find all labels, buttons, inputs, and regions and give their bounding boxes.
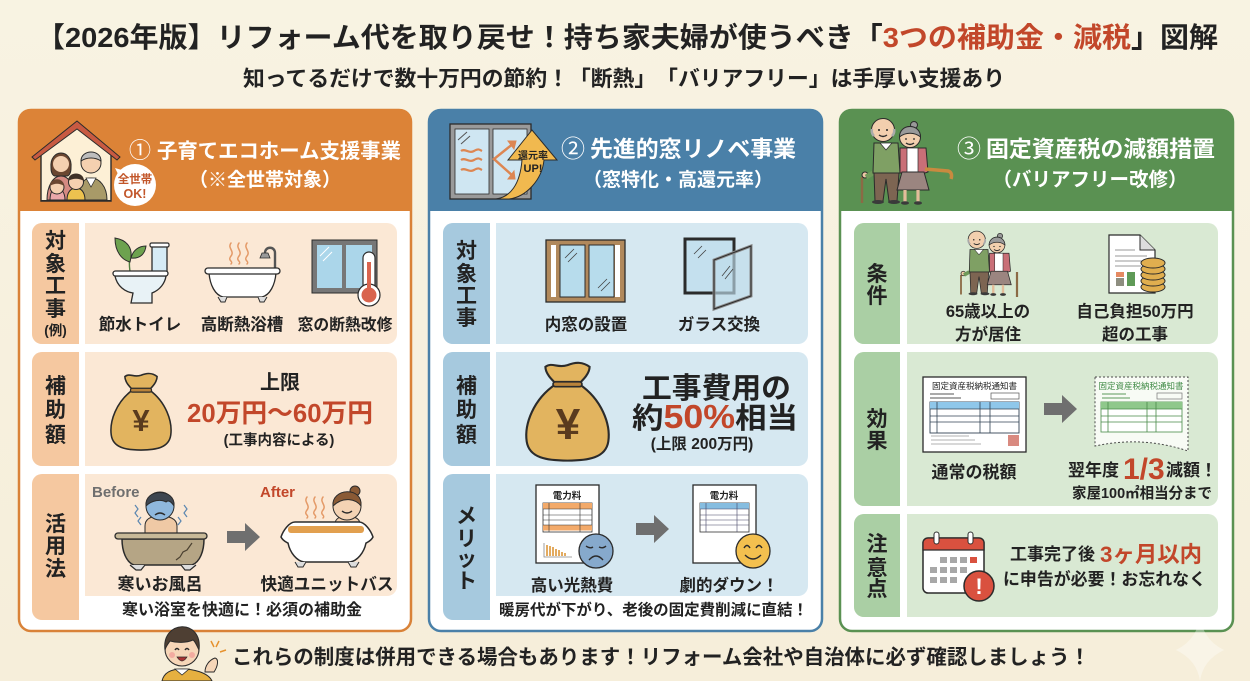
- icon: document and coins: [1109, 235, 1165, 293]
- label: 注: [866, 533, 888, 556]
- label: 活: [45, 513, 66, 536]
- text: [1003, 542, 1206, 589]
- row: 補助額: [32, 352, 397, 466]
- heading: ①: [129, 138, 151, 163]
- text: ガラス交換: [678, 315, 761, 334]
- panel: 固定資産税の減額措置: [839, 109, 1234, 631]
- text: 寒いお風呂: [118, 575, 202, 594]
- arrow: 還元率UP: [496, 130, 557, 199]
- icon: money bag: ¥: [132, 403, 150, 438]
- text: 翌年度: [1068, 460, 1119, 480]
- label: 額: [45, 424, 66, 447]
- text: 65歳以上の: [946, 302, 1030, 321]
- icon: money bag: [111, 373, 171, 450]
- before: cold bath: [92, 484, 207, 570]
- arrow: 還元率UP: UP!: [524, 163, 542, 175]
- label: ト: [456, 570, 477, 593]
- text: 高断熱浴槽: [201, 314, 283, 334]
- heading: ③: [957, 136, 981, 163]
- callout: 全世帯OK: OK!: [124, 187, 146, 201]
- label: 額: [456, 424, 477, 447]
- row: メリット: [443, 474, 808, 620]
- icon: reduced tax notice: [1095, 377, 1188, 451]
- row: 注意点: [854, 514, 1218, 617]
- amount: [632, 372, 798, 453]
- text: 自己負担50万円: [1076, 301, 1194, 321]
- heading: [129, 138, 401, 191]
- after: comfortable bath: [260, 484, 373, 567]
- icon: calendar alert: !: [975, 574, 983, 599]
- icon: high bill: [536, 485, 613, 568]
- text: 3ヶ月以内: [1100, 542, 1202, 567]
- arrow: [1044, 395, 1077, 423]
- label: 補: [456, 375, 477, 398]
- icon: low bill: 電力料: [710, 490, 739, 502]
- caption: 寒い浴室を快適に！必須の補助金: [122, 600, 362, 619]
- text: 内窓の設置: [545, 315, 627, 334]
- text: 高い光熱費: [531, 575, 613, 595]
- subtitle: 知ってるだけで数十万円の節約！「断熱」「バリアフリー」は手厚い支援あり: [243, 67, 1005, 91]
- label: 用: [45, 535, 66, 558]
- text: 節水トイレ: [99, 314, 181, 334]
- heading: ②: [561, 136, 585, 163]
- heading: （バリアフリー改修）: [992, 169, 1188, 191]
- label: 助: [45, 399, 66, 422]
- label: リ: [456, 528, 477, 551]
- row: 補助額: [443, 352, 808, 466]
- icon: inner window: [546, 240, 625, 302]
- text: [1068, 453, 1217, 502]
- heading: [561, 136, 796, 191]
- icon: money bag: ¥: [556, 400, 581, 449]
- heading: [957, 136, 1215, 191]
- label: 事: [456, 306, 477, 330]
- text: [946, 302, 1030, 344]
- icon: money bag: [526, 363, 609, 461]
- heading: 固定資産税の減額措置: [986, 137, 1215, 162]
- arrow: [636, 515, 669, 543]
- icon: normal tax notice: 固定資産税納税通知書: [932, 381, 1017, 391]
- amount: 工事費用の: [642, 372, 791, 405]
- label: 点: [866, 578, 888, 601]
- icon: toilet: [113, 238, 169, 303]
- text: に申告が必要！お忘れなく: [1003, 569, 1206, 589]
- text: 減額！: [1166, 461, 1217, 480]
- label: 対: [45, 230, 66, 253]
- title: 【2026年版】リフォーム代を取り戻せ！持ち家夫婦が使うべき「 3つの補助金・減税 」図解: [36, 21, 1218, 53]
- label: 助: [456, 399, 477, 422]
- icon: low bill: [693, 485, 770, 568]
- label: 象: [456, 263, 477, 286]
- heading: （※全世帯対象）: [189, 169, 341, 191]
- icon: bathtub: [205, 243, 280, 302]
- icon: window with thermometer: [312, 240, 380, 306]
- heading: 先進的窓リノベ事業: [590, 137, 796, 162]
- text: 方が居住: [955, 324, 1022, 344]
- amount: (上限 200万円): [651, 435, 753, 453]
- icon: glass pane: [685, 239, 751, 309]
- label: 事: [45, 297, 66, 321]
- text: 劇的ダウン！: [680, 575, 778, 595]
- label: 件: [866, 285, 888, 308]
- decoration: sparkle: [1176, 616, 1224, 681]
- row: 対象工事: [32, 223, 397, 344]
- label: 意: [866, 557, 888, 580]
- icon: seniors: [961, 231, 1017, 297]
- label: ッ: [456, 548, 477, 571]
- row: 活用法: [32, 474, 397, 620]
- label: 象: [45, 253, 66, 276]
- arrow: 還元率UP: 還元率: [518, 149, 548, 162]
- amount: [187, 371, 373, 449]
- icon: calendar alert: [923, 532, 994, 601]
- text: 通常の税額: [932, 463, 1016, 482]
- callout: 全世帯OK: 全世帯: [118, 172, 152, 186]
- row: 効果: [854, 352, 1218, 506]
- amount: 上限: [260, 371, 300, 394]
- caption: 暖房代が下がり、老後の固定費削減に直結！: [499, 600, 808, 619]
- icon: senior couple: [862, 118, 952, 205]
- label: 補: [45, 375, 66, 398]
- label: 対: [456, 240, 477, 263]
- text: 窓の断熱改修: [298, 316, 393, 334]
- panel: 先進的窓リノベ事業: [428, 109, 823, 631]
- label: 果: [866, 430, 888, 453]
- before: cold bath: Before: [92, 484, 140, 501]
- amount: 約50%相当: [632, 398, 798, 435]
- icon: high bill: 電力料: [553, 490, 582, 502]
- amount: (工事内容による): [224, 431, 335, 449]
- text: 快適ユニットバス: [260, 575, 394, 594]
- row: 対象工事: [443, 223, 808, 344]
- icon: normal tax notice: [923, 377, 1026, 452]
- after: comfortable bath: After: [260, 484, 295, 501]
- label: (例): [44, 323, 67, 338]
- arrow: [227, 523, 260, 551]
- footer message: これらの制度は併用できる場合もあります！リフォーム会社や自治体に必ず確認しましょう！: [232, 646, 1090, 669]
- icon: window with arrow: [450, 124, 557, 199]
- heading: 子育てエコホーム支援事業: [157, 140, 401, 163]
- label: 条: [866, 263, 888, 286]
- label: 工: [456, 285, 477, 308]
- icon: advising man: [162, 627, 226, 681]
- row: 条件: [854, 223, 1218, 344]
- label: メ: [456, 505, 477, 528]
- text: 工事完了後: [1010, 544, 1095, 564]
- callout: 全世帯OK: [114, 164, 156, 206]
- text: [1076, 301, 1194, 344]
- label: 効: [866, 408, 888, 431]
- text: 超の工事: [1102, 325, 1168, 344]
- icon: family house: [32, 121, 120, 202]
- text: 1/3: [1123, 453, 1165, 486]
- heading: （窓特化・高還元率）: [583, 169, 773, 191]
- icon: reduced tax notice: 固定資産税納税通知書: [1098, 381, 1184, 391]
- text: 家屋100㎡相当分まで: [1072, 484, 1212, 502]
- label: 工: [45, 275, 66, 298]
- panel: 子育てエコホーム支援事業: [18, 109, 412, 631]
- label: 法: [45, 558, 66, 581]
- amount: 20万円〜60万円: [187, 398, 373, 428]
